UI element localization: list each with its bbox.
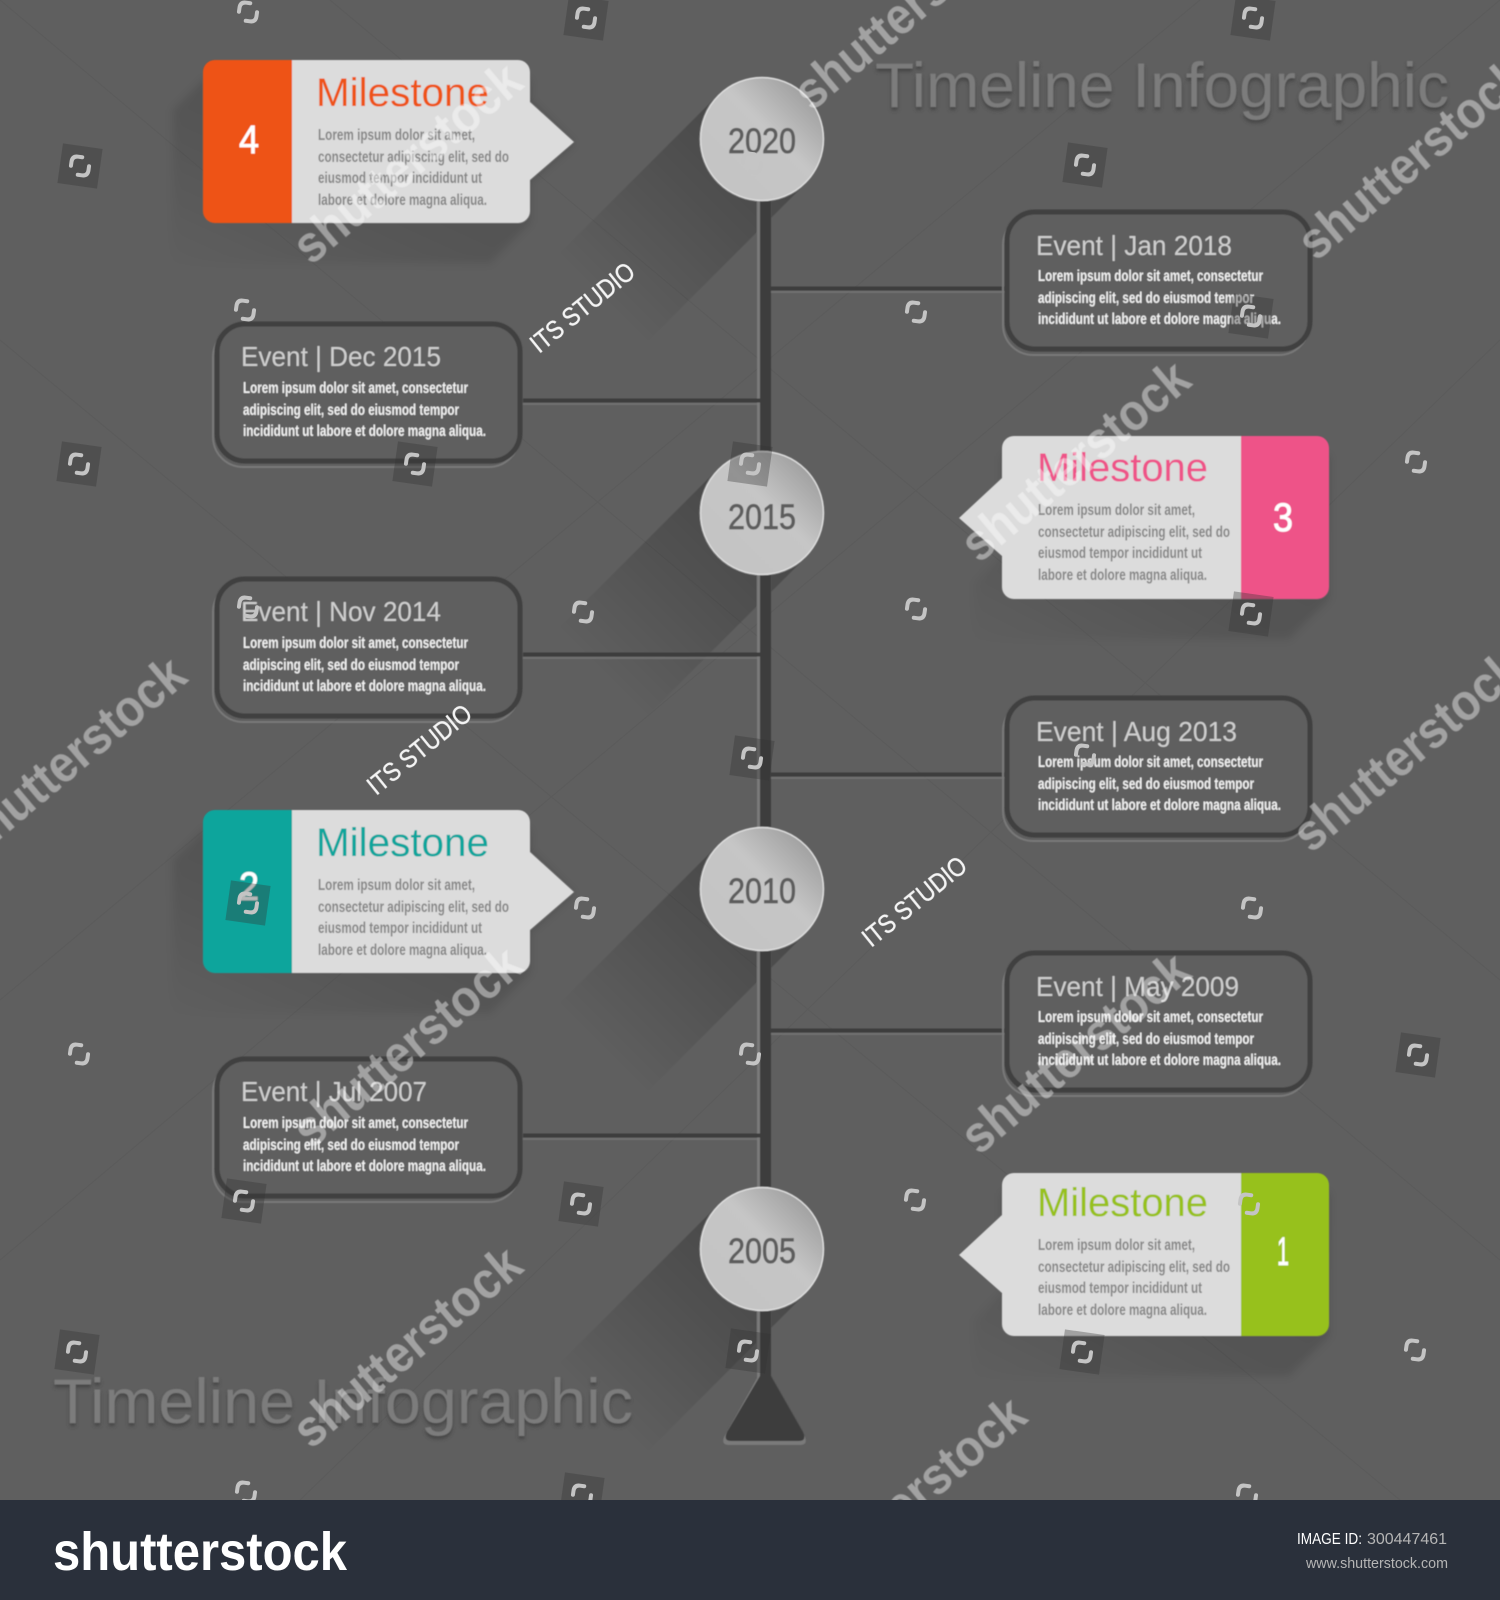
event: Jan 2018: Lorem ipsum dolor sit amet, consectetur: [1038, 268, 1263, 285]
event: Jan 2018: incididunt ut labore et dolore magna aliqua.: [1038, 311, 1281, 328]
event: Aug 2013: Event | Aug 2013: [1036, 716, 1237, 747]
image id number: 300447461: [1367, 1531, 1447, 1548]
milestone 4 card: consectetur adipiscing elit, sed do: [318, 149, 509, 166]
milestone 4 card: Lorem ipsum dolor sit amet,: [318, 127, 475, 144]
event: Aug 2013: Lorem ipsum dolor sit amet, consectetur: [1038, 754, 1263, 771]
milestone 2 card: [173, 810, 574, 1013]
event: Jul 2007: Event | Jul 2007: [241, 1076, 427, 1107]
long shadows of year circles: [552, 95, 806, 1459]
event: Jul 2007: Lorem ipsum dolor sit amet, consectetur: [243, 1115, 468, 1132]
footer bar: [0, 1500, 1500, 1600]
title bottom left: Timeline Infographic: [53, 1370, 633, 1440]
milestone 3 card: [959, 436, 1329, 639]
event: Nov 2014: incididunt ut labore et dolore magna aliqua.: [243, 678, 486, 695]
shutterstock watermark text: shutterstock: [281, 935, 533, 1159]
event: Nov 2014: [213, 579, 520, 722]
event: Dec 2015: Event | Dec 2015: [241, 341, 441, 372]
milestone 2 card: consectetur adipiscing elit, sed do: [318, 899, 509, 916]
title top right: Timeline Infographic: [875, 51, 1449, 121]
title top right: Timeline Infographic: [875, 54, 1449, 124]
year circle 2015: [700, 452, 824, 574]
milestone 1 card: [959, 1173, 1329, 1376]
year circle 2010: 2010: [728, 872, 796, 911]
milestone 4 card: [173, 60, 574, 263]
milestone 3 card: eiusmod tempor incididunt ut: [1038, 545, 1202, 562]
title bottom left: Timeline Infographic: [53, 1367, 633, 1437]
ITS Studio watermark labels: ITS STUDIO: [361, 698, 478, 801]
event: May 2009: adipiscing elit, sed do eiusmod tempor: [1038, 1031, 1254, 1048]
milestone 1 card: eiusmod tempor incididunt ut: [1038, 1280, 1202, 1297]
milestone 4 card: Milestone: [316, 71, 489, 115]
event: Aug 2013: adipiscing elit, sed do eiusmod tempor: [1038, 776, 1254, 793]
milestone 4 card: eiusmod tempor incididunt ut: [318, 170, 482, 187]
milestone 1 card: labore et dolore magna aliqua.: [1038, 1302, 1207, 1319]
ITS Studio watermark labels: ITS STUDIO: [524, 256, 641, 359]
milestone 2 card: 2: [239, 865, 259, 909]
event: Nov 2014: Event | Nov 2014: [241, 596, 441, 627]
event: Nov 2014: Lorem ipsum dolor sit amet, consectetur: [243, 635, 468, 652]
year circle 2020: [700, 78, 824, 200]
image id label: IMAGE ID:: [1297, 1531, 1362, 1548]
event: Jul 2007: [213, 1059, 520, 1202]
shutterstock watermark text: shutterstock: [281, 51, 533, 275]
milestone 3 card: Milestone: [1037, 446, 1208, 490]
event: Jan 2018: adipiscing elit, sed do eiusmod tempor: [1038, 290, 1254, 307]
connector lines: [523, 288, 1005, 1139]
milestone 4 card: 4: [239, 118, 259, 162]
axis base triangle: [723, 1376, 806, 1445]
event: Jul 2007: incididunt ut labore et dolore magna aliqua.: [243, 1158, 486, 1175]
year circle 2020: 2020: [728, 122, 796, 161]
event: May 2009: [1003, 953, 1310, 1096]
event: May 2009: Event | May 2009: [1036, 971, 1239, 1002]
footer logo: shutterstock: [53, 1522, 348, 1582]
milestone 3 card: 3: [1273, 496, 1293, 540]
milestone 2 card: Milestone: [316, 821, 489, 865]
event: Aug 2013: incididunt ut labore et dolore magna aliqua.: [1038, 797, 1281, 814]
milestone 2 card: labore et dolore magna aliqua.: [318, 942, 487, 959]
milestone 3 card: consectetur adipiscing elit, sed do: [1038, 524, 1230, 541]
milestone 1 card: 1: [1277, 1230, 1289, 1274]
milestone 1 card: consectetur adipiscing elit, sed do: [1038, 1259, 1230, 1276]
event: May 2009: Lorem ipsum dolor sit amet, consectetur: [1038, 1009, 1263, 1026]
milestone 3 card: Lorem ipsum dolor sit amet,: [1038, 502, 1195, 519]
event: Dec 2015: Lorem ipsum dolor sit amet, consectetur: [243, 380, 468, 397]
website: www.shutterstock.com: [1305, 1555, 1448, 1572]
event: Jan 2018: [1003, 212, 1310, 355]
event: Aug 2013: [1003, 698, 1310, 841]
milestone 3 card: labore et dolore magna aliqua.: [1038, 567, 1207, 584]
year circle 2015: 2015: [728, 498, 796, 537]
ITS Studio watermark labels: ITS STUDIO: [856, 850, 973, 953]
milestone 4 card: labore et dolore magna aliqua.: [318, 192, 487, 209]
milestone 2 card: Lorem ipsum dolor sit amet,: [318, 877, 475, 894]
ITS Studio watermark labels: [361, 256, 973, 953]
year circle 2010: [700, 828, 824, 950]
event: Nov 2014: adipiscing elit, sed do eiusmod tempor: [243, 657, 459, 674]
timeline axis: [757, 195, 771, 1385]
year circle 2005: 2005: [728, 1232, 796, 1271]
event: Dec 2015: incididunt ut labore et dolore magna aliqua.: [243, 423, 486, 440]
event: May 2009: incididunt ut labore et dolore magna aliqua.: [1038, 1052, 1281, 1069]
event: Dec 2015: adipiscing elit, sed do eiusmod tempor: [243, 402, 459, 419]
shutterstock watermark text: shutterstock: [949, 941, 1201, 1165]
milestone 2 card: eiusmod tempor incididunt ut: [318, 920, 482, 937]
shutterstock watermark text: shutterstock: [949, 349, 1201, 573]
event: Jan 2018: Event | Jan 2018: [1036, 230, 1232, 261]
event: Dec 2015: [213, 324, 520, 467]
milestone 1 card: Milestone: [1037, 1181, 1208, 1225]
year circle 2005: [700, 1188, 824, 1310]
milestone 1 card: Lorem ipsum dolor sit amet,: [1038, 1237, 1195, 1254]
shutterstock watermark text: shutterstock: [281, 1235, 533, 1459]
event: Jul 2007: adipiscing elit, sed do eiusmod tempor: [243, 1137, 459, 1154]
